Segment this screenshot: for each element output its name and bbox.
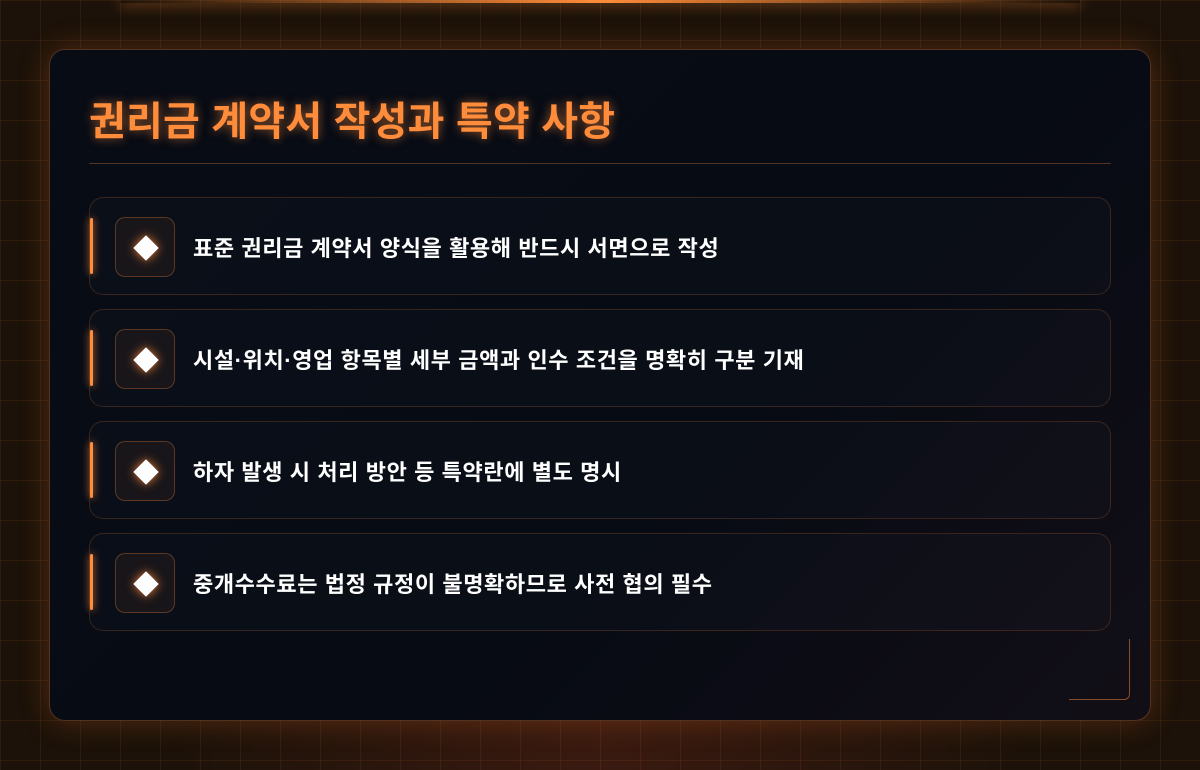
icon: diamond — [115, 441, 175, 501]
item 1 — [89, 197, 1111, 295]
icon: diamond — [115, 553, 175, 613]
text 1: 표준 권리금 계약서 양식을 활용해 반드시 서면으로 작성 — [193, 236, 719, 261]
text 3: 하자 발생 시 처리 방안 등 특약란에 별도 명시 — [193, 460, 622, 485]
text 2: 시설·위치·영업 항목별 세부 금액과 인수 조건을 명확히 구분 기재 — [193, 348, 804, 373]
item 3 — [89, 421, 1111, 519]
icon: diamond — [115, 329, 175, 389]
icon: diamond — [115, 217, 175, 277]
item 2 — [89, 309, 1111, 407]
item 4 — [89, 533, 1111, 631]
title: 권리금 계약서 작성과 특약 사항 — [89, 100, 615, 144]
text 4: 중개수수료는 법정 규정이 불명확하므로 사전 협의 필수 — [193, 572, 713, 597]
